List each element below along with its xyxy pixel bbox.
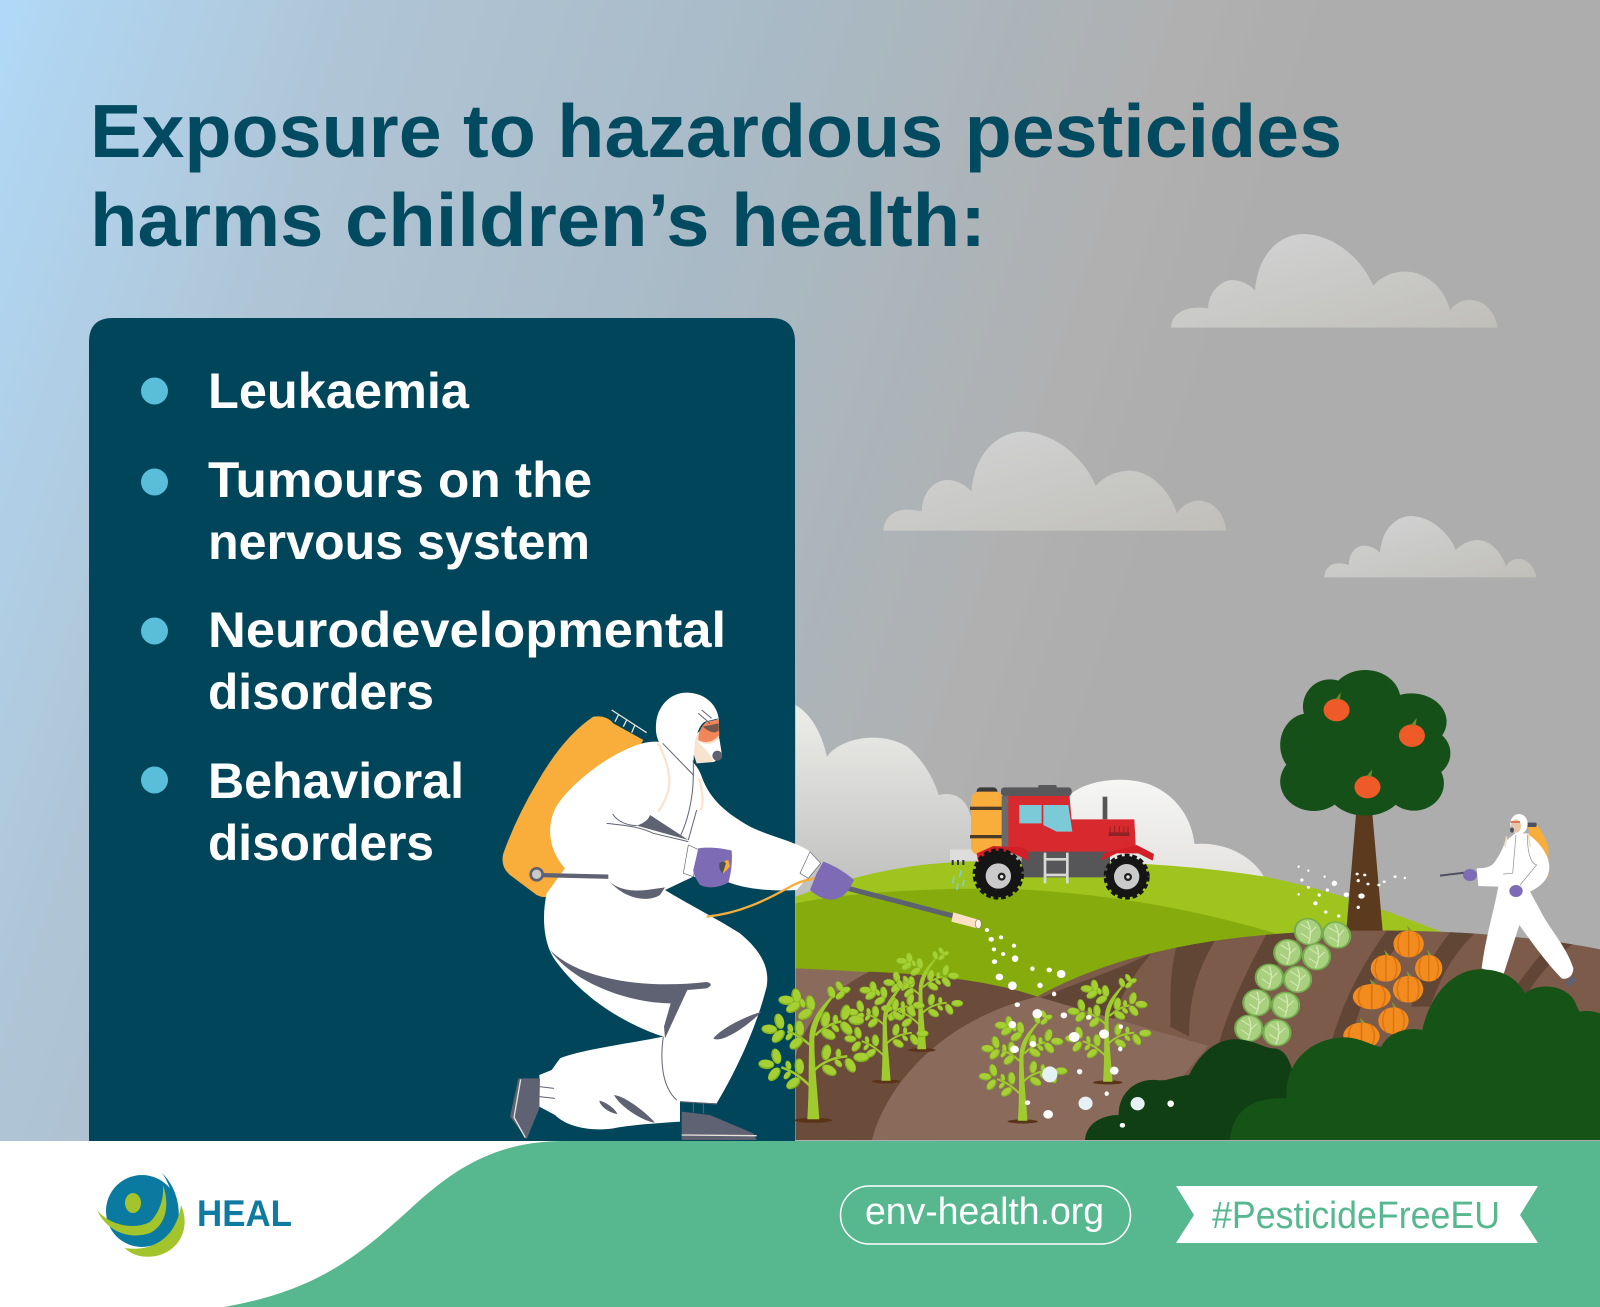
title: Exposure to hazardous pesticides: [90, 89, 1342, 173]
bullet list: Tumours on the: [208, 452, 592, 508]
footer band: [0, 1141, 1600, 1307]
bullet list: nervous system: [208, 514, 590, 570]
farm landscape scene: [796, 670, 1600, 1140]
logo wordmark: HEAL: [197, 1193, 292, 1234]
pesticide spray droplets: [985, 928, 1174, 1128]
far glove: [800, 852, 821, 878]
hashtag ribbon: #PesticideFreeEU: [1212, 1195, 1500, 1237]
large sprayer worker: [502, 693, 981, 1140]
spray wand: [842, 887, 953, 916]
front bushes: [1085, 969, 1600, 1140]
title: [90, 89, 1342, 262]
white suit: [539, 742, 820, 1129]
distant spray mist: [1298, 865, 1406, 918]
green hills: [796, 861, 1441, 1000]
hashtag ribbon: [1176, 1186, 1538, 1243]
tractor: [950, 785, 1154, 897]
backpack: [502, 716, 643, 897]
horizon clouds: [796, 705, 1265, 900]
tomato plants: [758, 946, 1151, 1124]
suit shadows and seams: [550, 815, 762, 1123]
clouds: [883, 234, 1536, 577]
small sprayer worker: [1440, 814, 1576, 987]
boots: [510, 1078, 540, 1139]
pack strap: [537, 875, 608, 877]
bullet list: [141, 363, 726, 871]
cabbages: [1235, 918, 1352, 1046]
front sleeve and glove: [683, 845, 699, 877]
bullet list: Behavioral: [208, 753, 464, 809]
pumpkins: [1343, 925, 1442, 1049]
title: harms children’s health:: [90, 178, 986, 262]
bullet list: disorders: [208, 664, 434, 720]
panel: health effects: [89, 318, 795, 1141]
apple tree: [1280, 670, 1450, 931]
bullet list: Neurodevelopmental: [208, 602, 726, 658]
bullet list: disorders: [208, 815, 434, 871]
soil fields: [796, 927, 1600, 1140]
website pill: env-health.org: [865, 1191, 1104, 1233]
bullet list: Leukaemia: [208, 363, 470, 419]
icon: HEAL logo: [97, 1173, 292, 1257]
website pill: [840, 1186, 1130, 1244]
hose: [707, 878, 822, 917]
head: [693, 718, 722, 763]
